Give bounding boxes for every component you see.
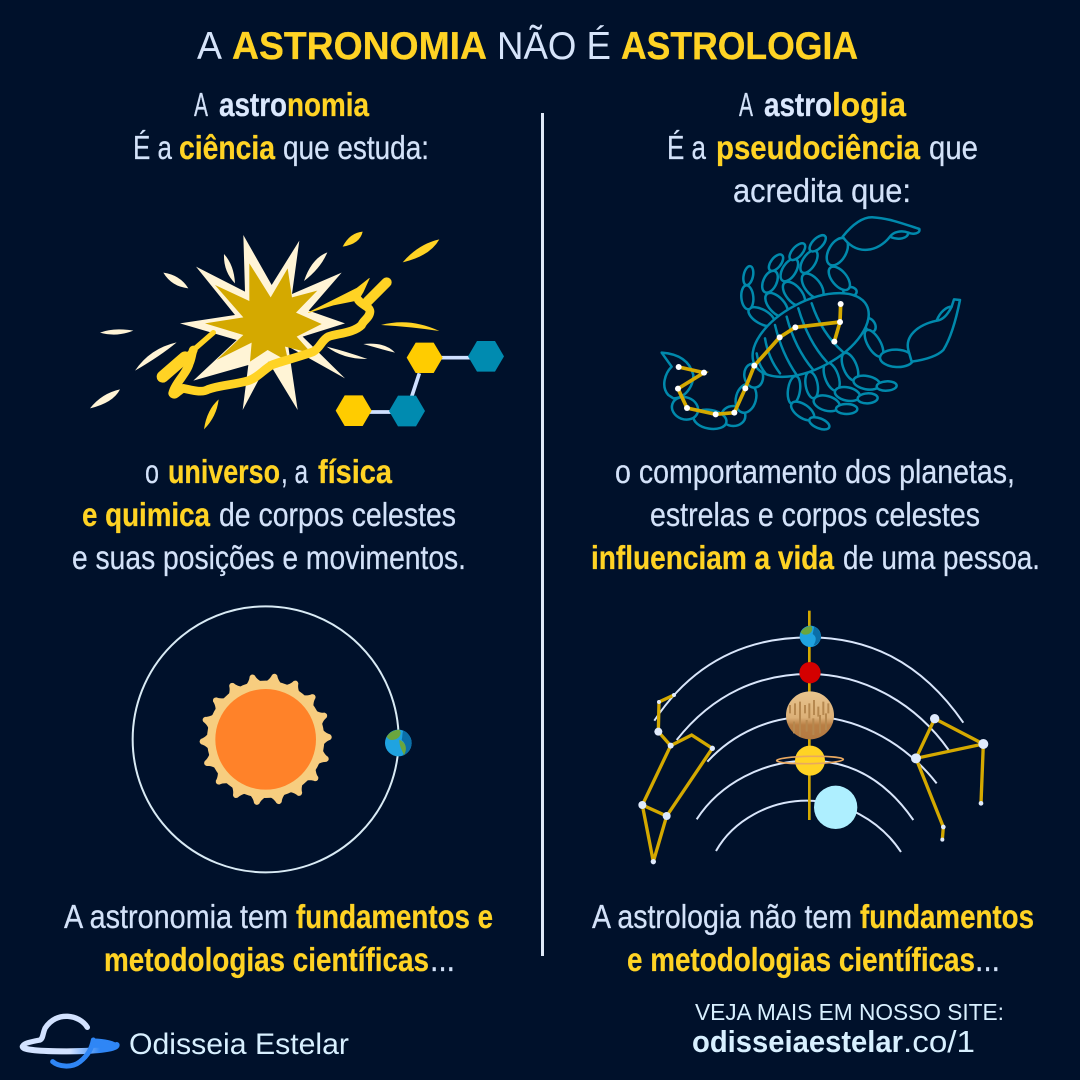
text: astrology believes [591,453,1040,576]
title: NÃO É [497,25,611,68]
particles yellow [204,232,439,429]
heading: astronomy definition: É a [133,129,172,166]
heading: astrology definition: É a [667,129,706,166]
left constellation [638,693,715,864]
heading: astronomy definition: nomia [287,86,370,123]
text: astrology has no scientific foundations: e metodologias científicas [627,941,975,978]
saturn [777,746,843,776]
molecule [336,341,504,426]
body [739,276,882,394]
heading: astrology definition: que [929,129,978,166]
heading: astronomy definition: astro [219,86,287,123]
text: astrology believes: de uma pessoa. [843,539,1040,576]
galaxy ring [163,278,387,394]
site link: VEJA MAIS EM NOSSO SITE: [695,999,1004,1025]
earth [385,730,412,756]
earth [800,626,821,647]
scorpion outline [662,217,960,432]
top claw [822,217,919,296]
text: astronomy studies: e suas posições e movimentos. [72,539,466,576]
text: astronomy studies: física [318,453,393,490]
text: astronomy studies [72,453,466,576]
text: astrology has no scientific foundations: fundamentos [860,898,1034,935]
heading: astronomy definition: que estuda: [283,129,429,166]
arcs [654,637,963,852]
heading: astrology definition: A [739,86,753,123]
logo wordmark: Odisseia Estelar [129,1028,349,1061]
site link: .co/1 [903,1024,975,1059]
heading: astrology definition: logia [832,86,907,123]
text: astronomy has scientific foundations: fundamentos e [296,898,493,935]
text: astronomy studies: o [145,453,159,490]
heading: astronomy definition: A [194,86,208,123]
heading: astrology definition: acredita que: [733,172,911,209]
text: astronomy has scientific foundations: A astronomia tem [64,898,288,935]
mars [799,662,821,683]
text: astronomy studies: , a [281,453,308,490]
right claw [861,299,960,368]
jupiter [786,691,834,739]
particles cream [90,252,395,408]
heading: astronomy definition [133,86,429,166]
orbit [133,606,399,872]
heading: astronomy definition: ciência [179,129,276,166]
heading: astrology definition: pseudociência [716,129,921,166]
title [197,25,858,68]
illustration: scorpion constellation [662,217,960,432]
text: astronomy has scientific foundations: ... [430,941,455,978]
text: astronomy studies: e quimica [82,496,211,533]
upper legs [740,232,829,330]
text: astronomy has scientific foundations: metodologias científicas [104,941,429,978]
text: astronomy studies: universo [168,453,280,490]
planet axis [808,611,811,820]
logo icon [23,1016,117,1066]
constellation lines [678,304,841,414]
text: astrology believes: o comportamento dos planetas, [615,453,1015,490]
text: astrology believes: influenciam a vida [591,539,835,576]
text: astrology has no scientific foundations: A astrologia não tem [592,898,852,935]
tail [662,353,765,431]
text: astrology has no scientific foundations: ... [975,941,1000,978]
illustration: planets and zodiac arcs [638,611,988,864]
star burst outer [180,235,345,410]
right constellation [911,714,988,842]
heading: astrology definition: astro [764,86,832,123]
illustration: exploding star and molecule [90,232,504,429]
sun [199,672,332,806]
title: A [197,25,222,68]
logo: Odisseia Estelar [23,1016,349,1066]
lower legs [786,351,897,432]
heading: astrology definition [667,86,978,209]
text: astrology believes: estrelas e corpos celestes [650,496,980,533]
site link: odisseiaestelar [692,1024,903,1059]
title: ASTRONOMIA [232,25,487,68]
constellation stars [675,301,844,417]
text: astronomy studies: de corpos celestes [219,496,456,533]
text: astrology has no scientific foundations [592,898,1034,978]
title: ASTROLOGIA [621,25,858,68]
site link [692,999,1004,1059]
text: astronomy has scientific foundations [64,898,493,978]
illustration: heliocentric orbit [133,606,412,872]
neptune [814,786,857,829]
star burst inner [205,263,322,362]
